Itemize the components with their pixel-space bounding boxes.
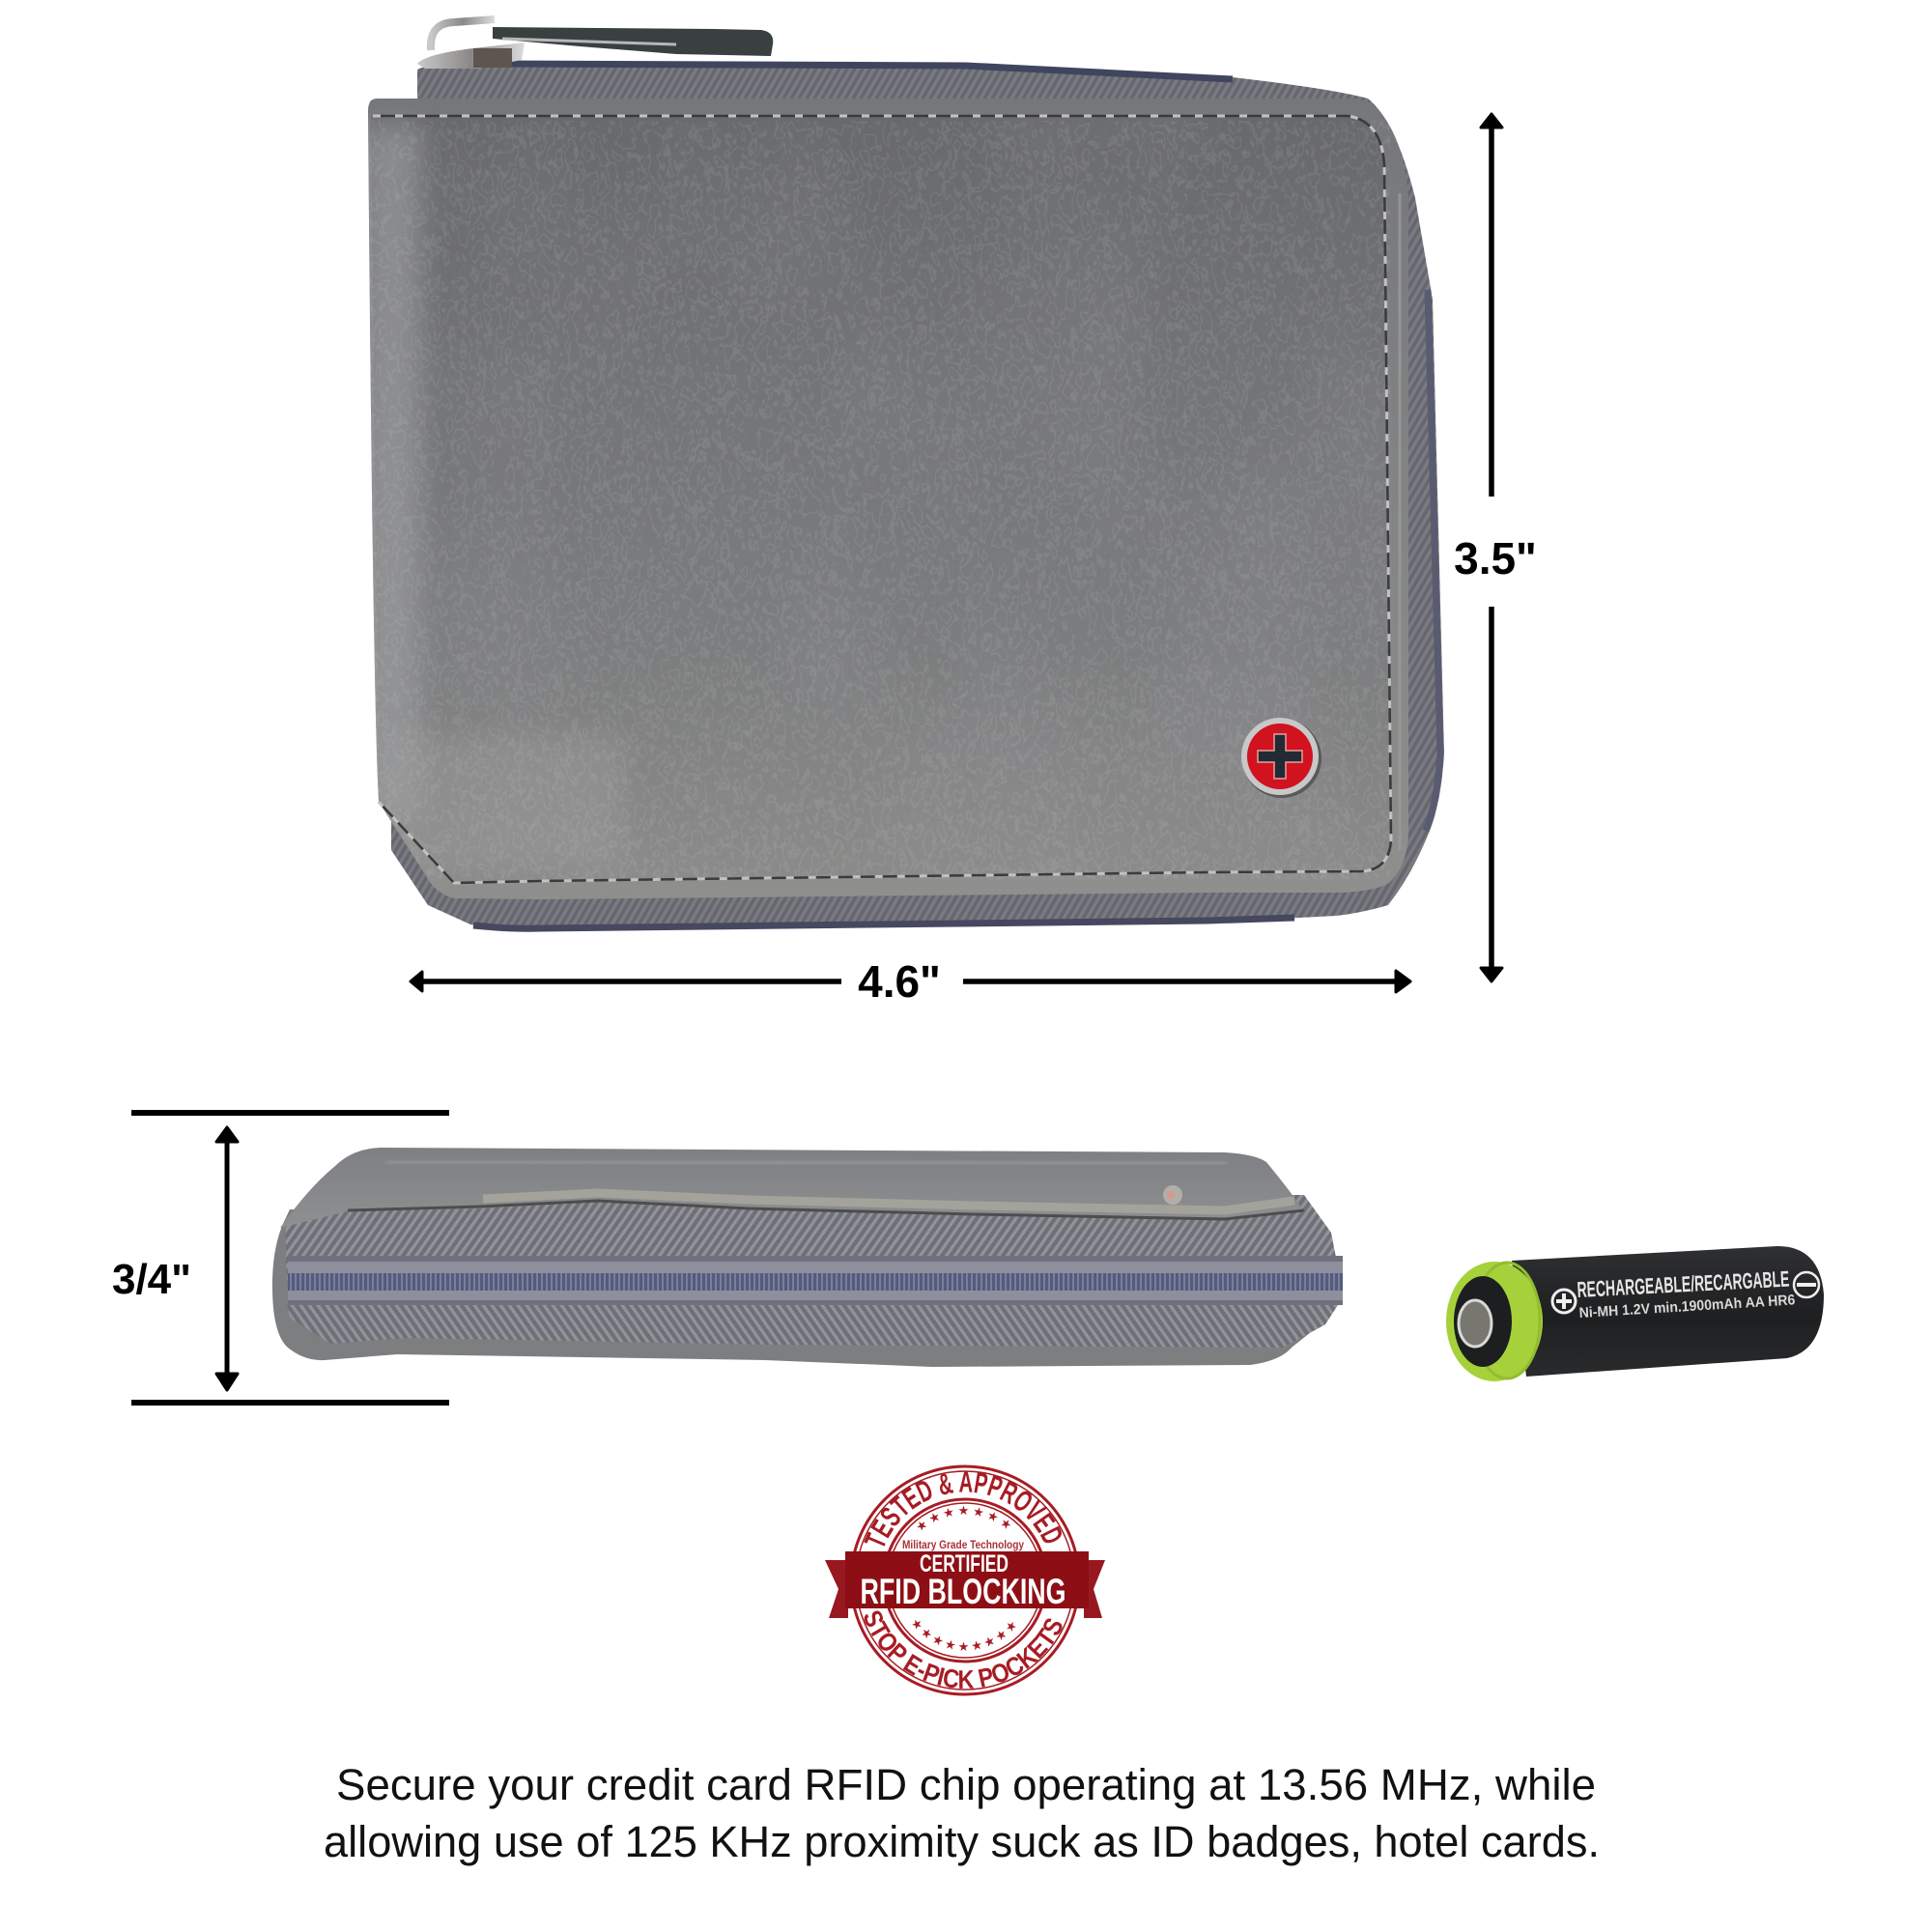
red cross emblem (1241, 718, 1321, 798)
inner end (1454, 1276, 1512, 1367)
stars: ★★★★★★★ (917, 1505, 1010, 1530)
width label: 4.6" (858, 956, 941, 1007)
terminal (1459, 1300, 1492, 1347)
stamp rings (851, 1466, 1079, 1694)
leather top flap (280, 1148, 1304, 1228)
plus symbol (1552, 1290, 1576, 1313)
bottom leather edge (272, 1209, 1325, 1367)
ribbon banner (845, 1551, 1089, 1608)
AA battery (1446, 1246, 1824, 1381)
military grade text: Military Grade Technology (902, 1540, 1025, 1551)
RFID stamp (825, 1464, 1105, 1696)
thickness bracket lines (131, 1110, 449, 1406)
description text: Secure your credit card RFID chip operating at 13.56 MHz, while (336, 1760, 1596, 1809)
minus symbol (1794, 1272, 1819, 1297)
zipper pull (417, 19, 773, 69)
wallet front view (362, 19, 1444, 930)
ribbon tails (825, 1560, 1105, 1618)
height label: 3.5" (1454, 533, 1537, 583)
width arrow (411, 971, 1410, 992)
height arrow (1481, 114, 1502, 981)
bottom arc text: STOP E-PICK POCKETS (864, 1611, 1063, 1689)
leather front panel (362, 99, 1408, 899)
wallet side view (272, 1148, 1343, 1367)
RFID blocking text: RFID BLOCKING (860, 1572, 1066, 1611)
green cap (1446, 1262, 1543, 1381)
description text (324, 1760, 1600, 1866)
stars (912, 1505, 1016, 1651)
battery body (1512, 1246, 1824, 1377)
thickness arrow (216, 1127, 238, 1390)
battery text line 2: Ni-MH 1.2V min.1900mAh AA HR6 (1578, 1292, 1796, 1321)
zipper teeth (288, 1256, 1343, 1305)
certified text: CERTIFIED (920, 1550, 1009, 1577)
stars: ★★★★★★★★★ (912, 1619, 1016, 1651)
top arc text: TESTED & APPROVED (864, 1472, 1062, 1547)
woven fabric band (286, 1195, 1343, 1348)
description text: allowing use of 125 KHz proximity suck as ID badges, hotel cards. (324, 1817, 1600, 1866)
thickness label: 3/4" (112, 1256, 191, 1303)
zipper tape: top, right and bottom (391, 62, 1444, 930)
battery text line 1: RECHARGEABLE/RECARGABLE (1577, 1266, 1790, 1302)
